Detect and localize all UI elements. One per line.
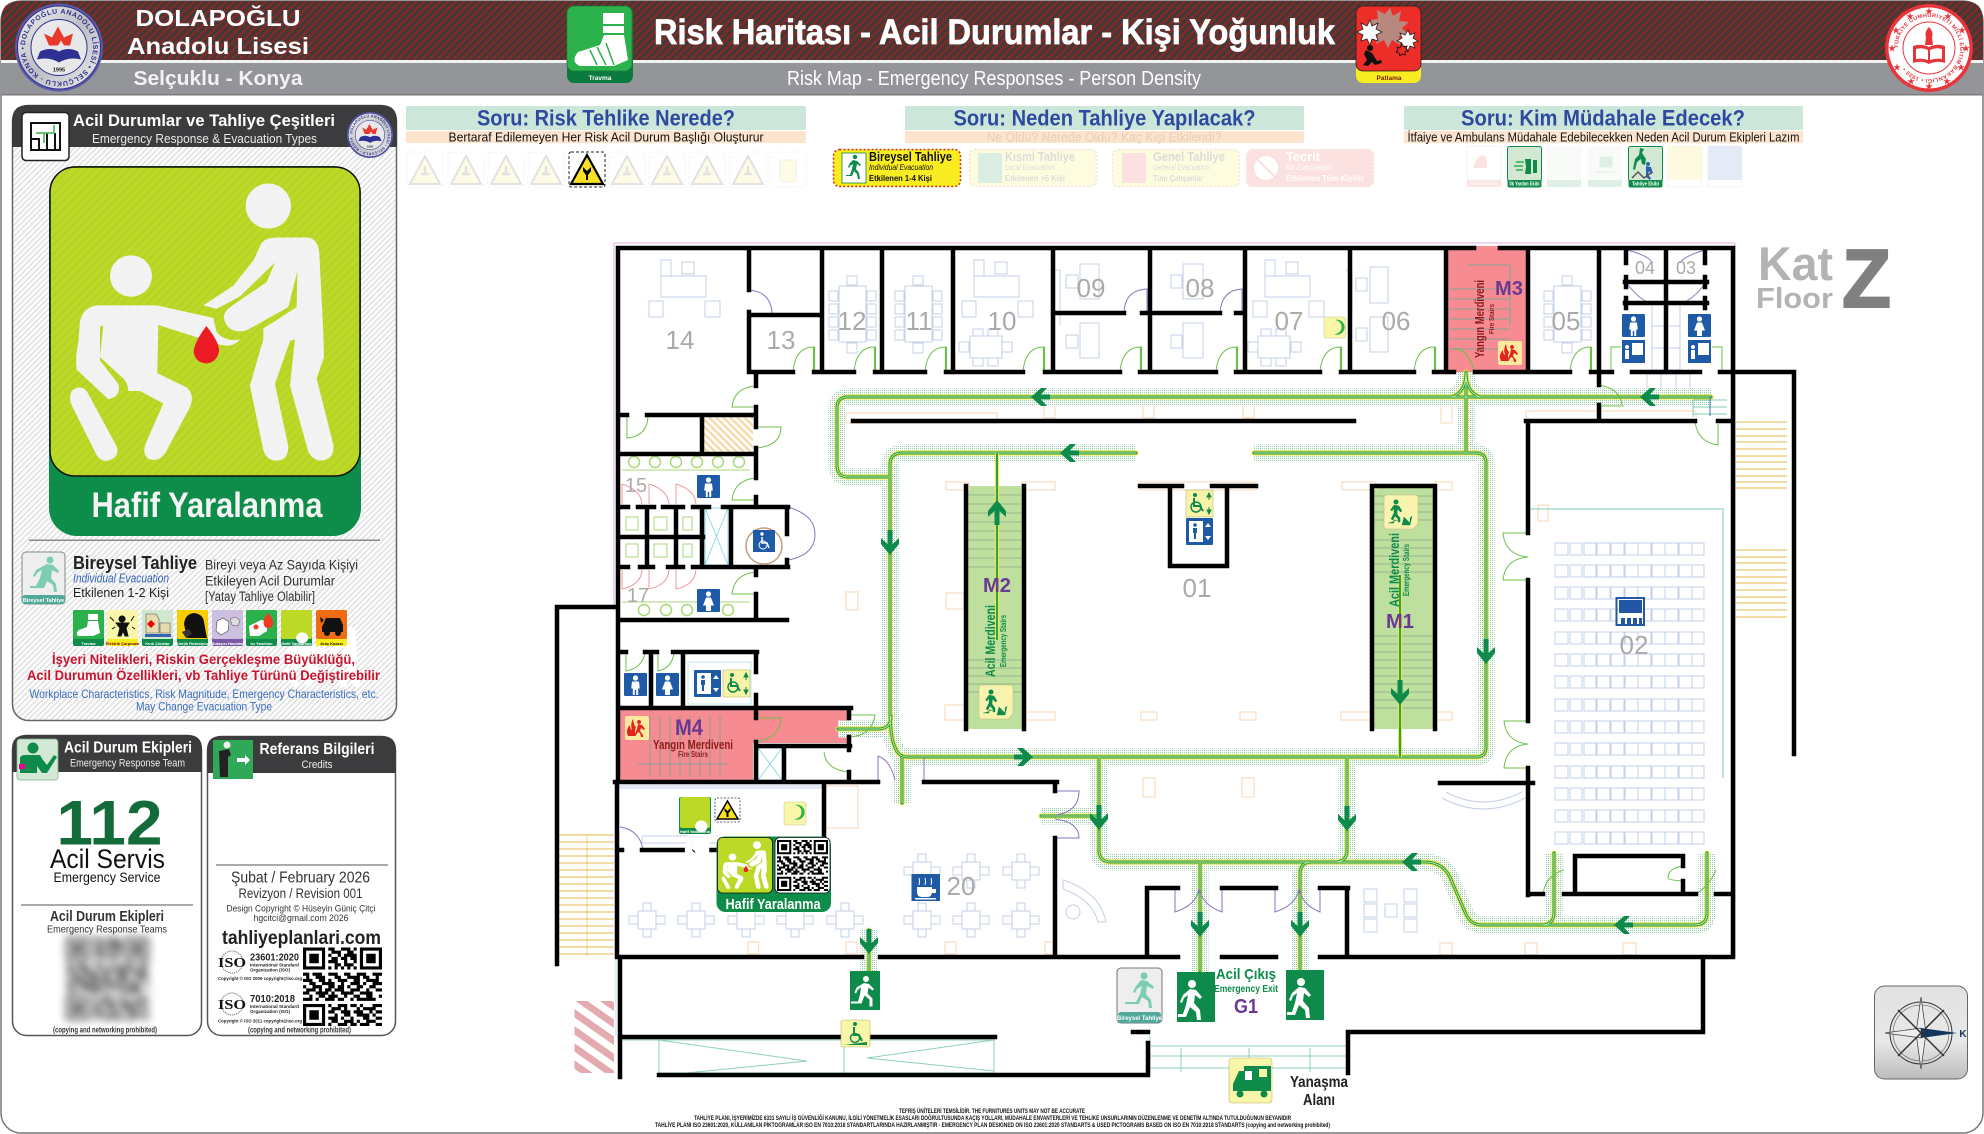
ministry logo: ★	[1892, 26, 1900, 35]
labels: room numbers: 13	[767, 325, 795, 355]
badge: individual evacuation: Bireysel Tahliye	[869, 150, 952, 164]
panel: credits: Credits	[302, 759, 333, 771]
badges: faded: Etkilenen >5 Kişi	[1005, 173, 1065, 183]
stair treads	[968, 495, 1433, 708]
icon: first aid sign	[679, 797, 762, 878]
tile: first aid team	[1508, 146, 1542, 188]
floor plan	[557, 232, 1968, 1129]
text: english note	[30, 687, 378, 714]
footer disclaimer: TAHLİYE PLANI, İŞYERİMİZDE 6331 SAYILI İŞ GÜVENLİĞİ KANUNU, İLGİLİ YÖNETMELİK ESASLARI DOĞRULTUSUNDA KAÇIŞ YOLLARI, MÜDAHALE ENVANTERLERİ VE TEHLİKE UNSURLARININ DÜZENLENME VE DENETİM ALTINDA TUTULDUĞUNUN BEYANIDIR	[694, 1113, 1291, 1122]
text: description: Bireyi veya Az Sayıda Kişiyi	[205, 558, 358, 572]
stairs M1 label: Emergency Stairs	[1402, 544, 1411, 596]
cafe tables	[629, 854, 1039, 937]
label: emergency exit: Emergency Exit	[1214, 984, 1279, 995]
footer disclaimer: TEFRİŞ ÜNİTELERİ TEMSİLİDİR. THE FURNITURES UNITS MAY NOT BE ACCURATE	[899, 1106, 1085, 1115]
panel: emergency team: Acil Servis	[50, 844, 165, 874]
question 3 heading: Soru: Kim Müdahale Edecek?	[1461, 106, 1745, 130]
badge: individual evacuation	[834, 150, 960, 186]
panel: credits	[207, 736, 396, 1036]
tile: evacuation team: Tahliye Ekibi	[1632, 182, 1660, 188]
icon: individual evacuation sign	[1117, 968, 1163, 1023]
text: individual evacuation: Bireysel Tahliye	[73, 553, 197, 573]
text: date and revision: hgcitci@gmail.com 2026	[254, 913, 348, 924]
iso 23601: Copyright © ISO 2009 copyright@iso.org	[218, 975, 302, 981]
text: english note: May Change Evacuation Type	[136, 700, 272, 714]
panel: emergency response types	[12, 105, 397, 720]
footer disclaimer: TAHLİYE PLANI ISO 23601:2020, KULLANILAN PİKTOGRAMLAR ISO EN 7010:2018 STANDARTLARINDA HAZIRLANMIŞTIR - EMERGENCY PLAN DESIGNED ON ISO 23601:2020 STANDARTS & USED PICTOGRAMS BASED ON ISO EN 7010:2018 STANDARTS (copying and networking prohibited)	[655, 1121, 1330, 1129]
stairs M1 label: M1	[1386, 611, 1414, 633]
ministry logo: ★	[1906, 12, 1914, 21]
school name: Anadolu Lisesi	[127, 33, 309, 59]
text: date and revision: Revizyon / Revision 001	[238, 885, 363, 901]
footer disclaimer	[655, 1106, 1330, 1129]
stairs M4 label: M4	[675, 715, 704, 740]
emergency number: 112	[56, 788, 162, 858]
iso 7010: Organization (ISO)	[250, 1009, 290, 1014]
icon: exit 2	[1177, 972, 1215, 1022]
icon: individual evacuation sign: Bireysel Tahliye	[1117, 1016, 1163, 1022]
text: date and revision: Design Copyright © Hüseyin Güniç Çitçi	[226, 904, 376, 914]
decorative outline	[614, 243, 1735, 957]
iso 7010: 7010:2018	[250, 994, 295, 1005]
lift shafts	[705, 508, 782, 780]
labels: room numbers: 07	[1275, 306, 1303, 336]
text: english note: Workplace Characteristics, Risk Magnitude, Emergency Characteristics, etc.	[30, 687, 378, 701]
furniture	[620, 260, 1723, 937]
icon: crescent 07	[1324, 317, 1346, 338]
panel: emergency team: Acil Durum Ekipleri	[64, 740, 192, 756]
ministry logo: ★	[1962, 44, 1970, 53]
evacuation routes	[837, 372, 1711, 971]
panel: emergency team: (copying and networking prohibited)	[53, 1026, 157, 1034]
icon: team	[17, 739, 58, 780]
labels: room numbers: 03	[1676, 258, 1696, 278]
iso 7010: ISO	[218, 998, 246, 1013]
icons: emergency types: Hafif Yaralanma	[282, 641, 312, 646]
panel: emergency team: Acil Durum Ekipleri	[50, 908, 164, 925]
tile: evacuation team	[1628, 146, 1662, 188]
ministry logo: ★	[1893, 63, 1901, 72]
icon: theatre	[1616, 598, 1644, 625]
stairs M4 label	[653, 715, 733, 759]
question 1 heading	[406, 106, 806, 144]
stairs M3 label: Yangın Merdiveni	[1472, 280, 1487, 358]
text: date and revision	[226, 870, 376, 924]
icons: plan signage	[624, 314, 1711, 1103]
fire stair zones	[620, 246, 1526, 780]
ministry logo: ★	[1958, 26, 1966, 35]
text: individual evacuation: Individual Evacuation	[73, 572, 169, 586]
main title: Risk Haritası - Acil Durumlar - Kişi Yoğunluk	[654, 13, 1335, 52]
panel: emergency team	[12, 735, 202, 1036]
icon: trauma	[567, 6, 633, 83]
big sign: minor injury	[49, 166, 361, 536]
badges: faded: Etkilenen Tüm Kişiler	[1286, 173, 1365, 183]
team tiles	[1467, 146, 1742, 188]
red hatched area	[574, 1001, 614, 1073]
QR code	[303, 948, 382, 1026]
badges: faded: Tüm Çalışanlar	[1153, 173, 1204, 183]
question 2 heading: Soru: Neden Tahliye Yapılacak?	[954, 106, 1256, 130]
stairs M1 label	[1386, 533, 1414, 633]
icon: floor plan	[22, 112, 69, 160]
stairs M1 label: Acil Merdiveni	[1386, 533, 1402, 607]
labels: room numbers	[625, 258, 1696, 901]
entry thresholds	[616, 957, 660, 1038]
icon: crescent cafe	[784, 802, 806, 825]
text: warning red	[27, 651, 381, 683]
label: loading area	[1290, 1074, 1348, 1109]
icon: trauma: Travma	[589, 75, 612, 82]
header band	[1, 1, 1983, 96]
question 1 heading: Soru: Risk Tehlike Nerede?	[477, 106, 735, 130]
labels: room numbers: 10	[988, 306, 1016, 336]
icon: disabled toilet	[746, 528, 782, 564]
subtitle: Risk Map - Emergency Responses - Person Density	[787, 68, 1201, 90]
iso 7010: International Standard	[250, 1004, 299, 1009]
outside stairs	[559, 422, 1787, 956]
icons: emergency types: Bulaşıcı Hastalık	[212, 641, 244, 646]
stairs M2 label: Emergency Stairs	[999, 615, 1008, 667]
label: floor: Z	[1842, 232, 1891, 325]
icons: emergency types: Isı Yanıkları	[251, 641, 272, 646]
panel: emergency team: Emergency Response Teams	[47, 924, 167, 936]
icons: emergency types: Araç Kazası	[320, 641, 343, 646]
icons: emergency types: Elektrik Çarpması	[106, 641, 139, 646]
iso 7010: Copyright © ISO 2011 copyright@iso.org	[218, 1018, 302, 1024]
blurred QR	[66, 937, 149, 1020]
arrows	[860, 388, 1659, 954]
icons: emergency types: Travma	[81, 641, 96, 646]
question 3 heading	[1404, 106, 1803, 144]
panel header: Emergency Response & Evacuation Types	[92, 131, 317, 146]
panel header: Acil Durumlar ve Tahliye Çeşitleri	[73, 111, 335, 130]
team tiles: Söndürme Ekibi	[1470, 181, 1498, 186]
labels: room numbers: 17	[627, 585, 649, 607]
ministry logo: ★	[1944, 12, 1952, 21]
icon: ambulance	[1229, 1058, 1272, 1103]
stairs M4 label: Fire Stairs	[678, 750, 708, 759]
badges: faded: General Evacuation	[1153, 163, 1209, 172]
label: loading area: Alanı	[1303, 1092, 1335, 1109]
icons: emergency types: Alerjik Reaksiyon	[176, 641, 210, 646]
icons: emergency types: Kırık Çıkıklar	[145, 641, 170, 646]
icon: individual evacuation	[22, 552, 65, 604]
stair symbol at corridor	[1693, 397, 1727, 417]
small school logo	[338, 109, 393, 158]
badges: faded: Kısmi Tahliye	[1005, 150, 1075, 164]
icon: wheelchair ramp	[841, 1020, 870, 1047]
question 1 heading: Bertaraf Edilemeyen Her Risk Acil Durum Başlığı Oluşturur	[448, 130, 764, 144]
text: description: Etkileyen Acil Durumlar	[205, 574, 335, 588]
toilets and sinks	[622, 456, 750, 616]
text: description: [Yatay Tahliye Olabilir]	[205, 589, 315, 604]
iso 23601: 23601:2020	[250, 952, 299, 964]
label: loading area: Yanaşma	[1290, 1074, 1348, 1091]
iso 23601: Organization (ISO)	[250, 968, 290, 972]
hall 02 seats	[1555, 543, 1704, 844]
labels: room numbers: 02	[1620, 630, 1648, 660]
big sign: minor injury: Hafif Yaralanma	[92, 486, 323, 525]
text: warning red: İşyeri Nitelikleri, Riskin Gerçekleşme Büyüklüğü,	[52, 651, 355, 667]
doors	[620, 250, 1727, 912]
icon: exit 1	[850, 971, 880, 1010]
hazard tiles	[407, 152, 806, 187]
badges: faded: No Evacuation	[1286, 163, 1331, 172]
icon: hazard	[715, 798, 740, 822]
icon: individual evacuation: Bireysel Tahliye	[23, 598, 64, 604]
evacuation badges	[834, 150, 1374, 186]
labels: room numbers: 11	[906, 306, 932, 336]
iso 23601	[218, 951, 302, 981]
school logo	[15, 4, 103, 92]
iso 7010	[218, 993, 302, 1024]
iso 23601: ISO	[218, 956, 246, 971]
labels: room numbers: 01	[1183, 573, 1211, 603]
labels: room numbers: 14	[666, 325, 694, 355]
question 2 heading: Ne Oldu? Nerede Oldu? Kaç Kişi Etkilendi?	[986, 130, 1222, 144]
panel: credits: (copying and networking prohibited)	[248, 1026, 351, 1034]
stairs M2 label: Acil Merdiveni	[982, 605, 998, 677]
ministry logo: ★	[1925, 7, 1933, 16]
question 2 heading	[905, 106, 1304, 144]
labels: room numbers: 15	[625, 475, 647, 497]
store hatch	[704, 417, 753, 452]
card: minor injury on plan	[716, 836, 831, 913]
compass: K	[1959, 1029, 1967, 1040]
text: individual evacuation	[73, 553, 197, 600]
labels: room numbers: 05	[1552, 306, 1580, 336]
icon: two figures	[70, 184, 333, 461]
ministry logo	[1885, 4, 1973, 92]
labels: room numbers: 08	[1186, 273, 1214, 303]
text: warning red: Acil Durumun Özellikleri, vb Tahliye Türünü Değiştirebilir	[27, 667, 381, 683]
ministry logo: ★	[1943, 77, 1951, 86]
badges: faded: Genel Tahliye	[1153, 150, 1225, 164]
icon: first aid sign: Hafif Yaralanma	[680, 829, 711, 834]
label: emergency exit: G1	[1234, 996, 1258, 1018]
icon: exit photo	[213, 740, 253, 779]
compass	[1874, 986, 1968, 1079]
text: individual evacuation: Etkilenen 1-2 Kişi	[73, 585, 169, 600]
badge: individual evacuation: Individual Evacuation	[869, 163, 933, 172]
panel: emergency team: Emergency Response Team	[70, 758, 185, 770]
iso 23601: International Standard	[250, 962, 299, 968]
panel: emergency team: Emergency Service	[54, 870, 160, 885]
labels: room numbers: 09	[1077, 273, 1105, 303]
icon: explosion: Patlama	[1377, 75, 1402, 82]
stairs M4 label: Yangın Merdiveni	[653, 737, 733, 752]
panel header	[12, 105, 397, 147]
text: description	[205, 558, 358, 604]
stairs M3 label	[1472, 278, 1523, 358]
ministry logo: ★	[1925, 82, 1933, 91]
label: floor	[1756, 232, 1891, 325]
stairs M3 label: M3	[1495, 278, 1523, 300]
ramp and loading lines	[620, 1036, 1347, 1073]
school name: Selçuklu - Konya	[134, 68, 303, 90]
walls	[557, 248, 1794, 1077]
ministry logo: ★	[1957, 63, 1965, 72]
label: emergency exit	[1214, 966, 1279, 1018]
badges: faded: Local Evacuation	[1005, 163, 1055, 172]
labels: room numbers: 04	[1635, 258, 1655, 278]
text: date and revision: Şubat / February 2026	[231, 870, 370, 886]
emergency stairs	[966, 486, 1435, 729]
stairs M3 label: Fire Stairs	[1489, 304, 1496, 334]
label: emergency exit: Acil Çıkış	[1216, 966, 1276, 983]
labels: room numbers: 06	[1382, 306, 1410, 336]
stairs M2 label: M2	[983, 575, 1011, 597]
tile: first aid team: İlk Yardım Ekibi	[1510, 180, 1540, 188]
active hazard tile	[569, 152, 605, 187]
stairs M2 label	[982, 575, 1011, 677]
school name	[127, 4, 309, 90]
badges: faded	[970, 150, 1374, 186]
card: minor injury on plan: Hafif Yaralanma	[726, 896, 821, 913]
labels: room numbers: 20	[947, 871, 975, 901]
panel: credits: Referans Bilgileri	[260, 741, 374, 758]
school name: DOLAPOĞLU	[136, 4, 300, 31]
badges: faded: Tecrit	[1286, 150, 1321, 164]
label: floor: Floor	[1756, 283, 1833, 315]
ministry logo: TÜRKİYE CUMHURİYETİ MİLLİ EĞİTİM BAKANLIĞI • 1920 •	[1894, 13, 1964, 84]
question 3 heading: İtfaiye ve Ambulans Müdahale Edebilecekken Neden Acil Durum Ekipleri Lazım	[1408, 130, 1800, 144]
label: floor: Kat	[1758, 237, 1833, 290]
icon: cafe cup	[912, 874, 940, 901]
ministry logo: ★	[1907, 77, 1915, 86]
icons: emergency types	[73, 610, 360, 687]
ministry logo: ★	[1888, 44, 1896, 53]
badge: individual evacuation: Etkilenen 1-4 Kişi	[869, 173, 932, 183]
orange column outlines	[748, 403, 1696, 955]
labels: room numbers: 12	[838, 306, 866, 336]
icon: exit 3	[1286, 970, 1324, 1020]
icon: explosion	[1356, 6, 1421, 83]
panel: credits: tahliyeplanlari.com	[222, 928, 381, 949]
